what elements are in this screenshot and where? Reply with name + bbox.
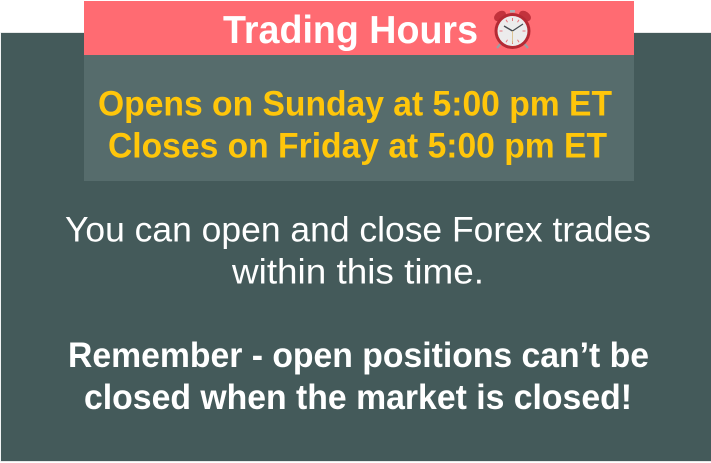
text block: opening hours: Opens on Sunday at 5:00 pm ET <box>98 84 612 124</box>
heading: Trading Hours: Trading Hours <box>223 9 478 52</box>
text block: opening hours: Closes on Friday at 5:00 pm ET <box>108 126 607 166</box>
text block: reminder: Remember - open positions can’t be <box>68 336 649 375</box>
header banner <box>84 1 634 55</box>
text block: description: You can open and close Forex trades <box>65 210 651 250</box>
text block: description: within this time. <box>231 252 484 292</box>
panel: hours box <box>84 55 634 181</box>
text block: reminder: closed when the market is closed! <box>84 378 632 417</box>
text block: description <box>65 210 651 292</box>
icon: alarm clock <box>492 9 533 49</box>
text block: opening hours <box>98 84 612 166</box>
text block: reminder <box>68 336 649 417</box>
